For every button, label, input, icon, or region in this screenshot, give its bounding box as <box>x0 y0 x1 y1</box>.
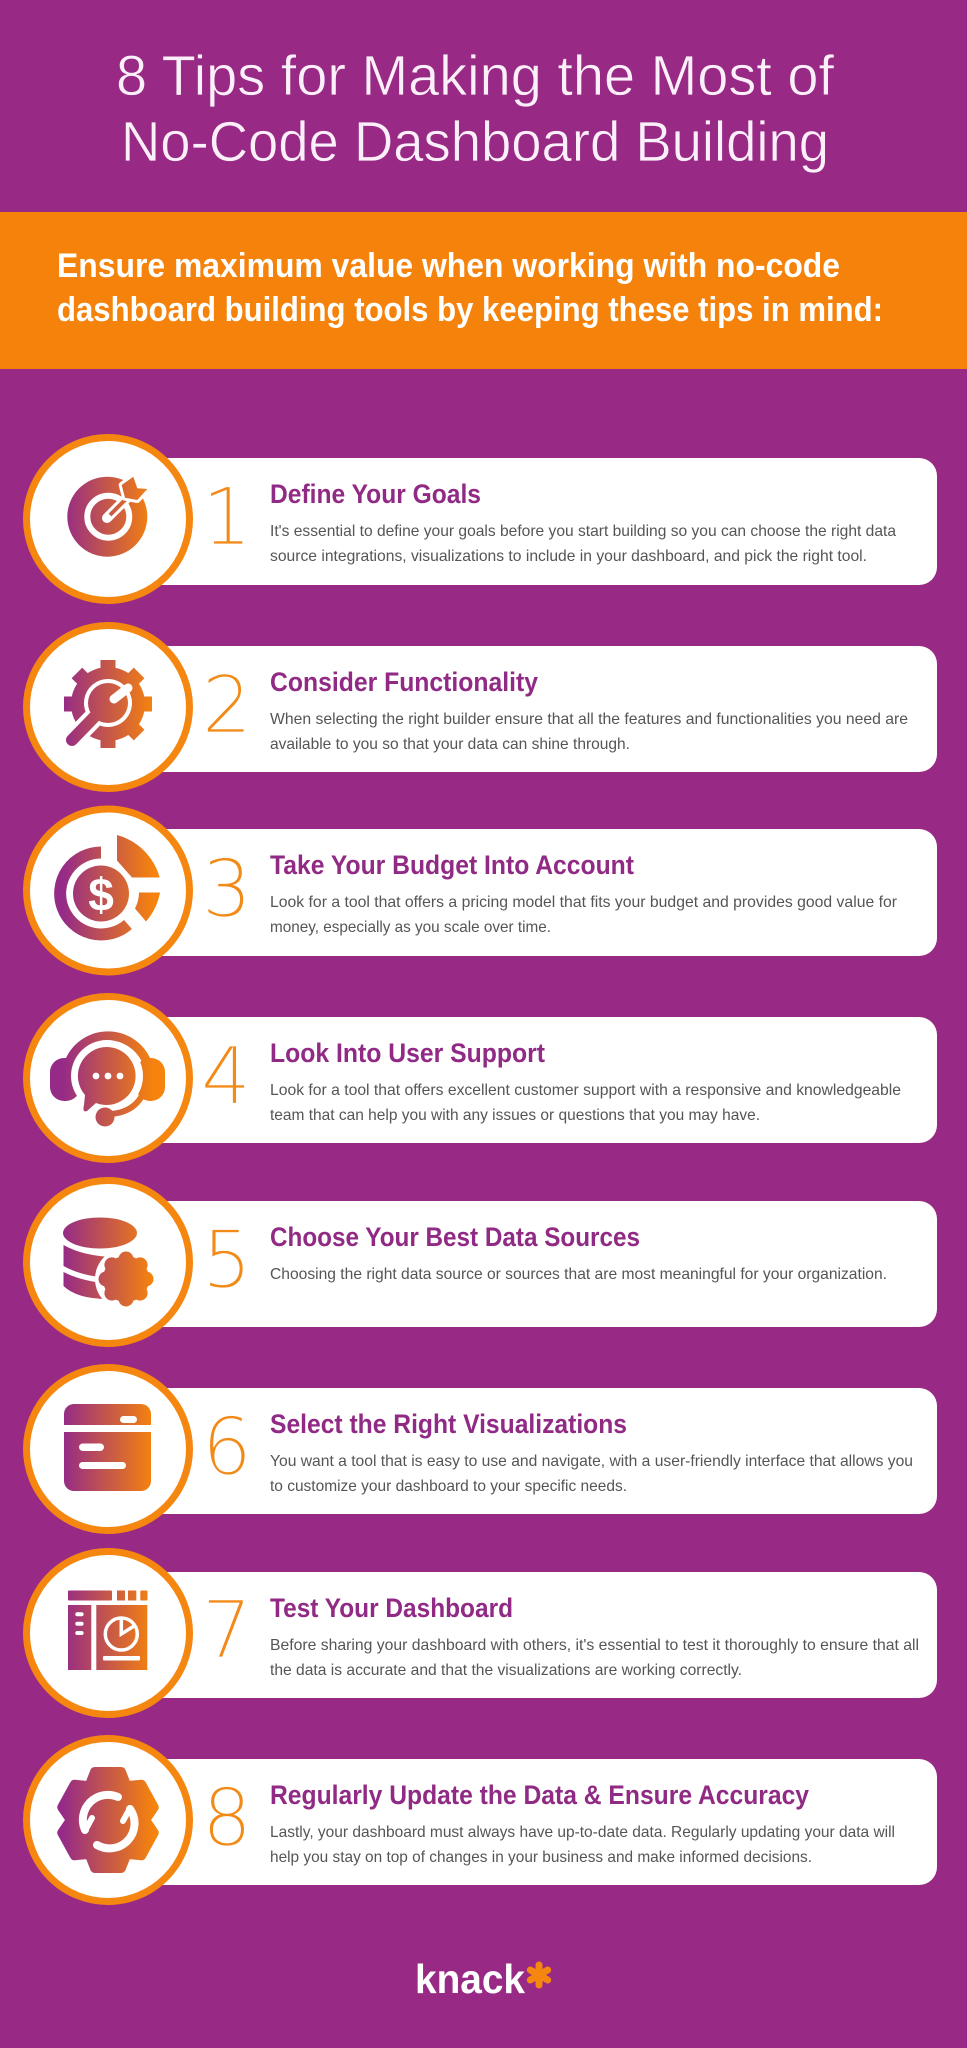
tip 5 <box>26 1180 937 1344</box>
tip 2: Consider Functionality <box>270 667 538 697</box>
tip 4: team that can help you with any issues or questions that you may have. <box>270 1107 760 1124</box>
tip 6: to customize your dashboard to your specific needs. <box>270 1478 627 1495</box>
title: 8 Tips for Making the Most of <box>116 44 834 108</box>
subtitle banner <box>0 212 967 369</box>
title: No-Code Dashboard Building <box>121 110 829 174</box>
tip 6: Select the Right Visualizations <box>270 1409 627 1439</box>
icon: budget pie with dollar: $ <box>88 868 114 920</box>
tip 7: the data is accurate and that the visualizations are working correctly. <box>270 1662 742 1679</box>
tip 8 <box>26 1738 937 1902</box>
tip 4: Look Into User Support <box>270 1038 545 1068</box>
tip 5: Choose Your Best Data Sources <box>270 1222 640 1252</box>
icon: dashboard with pie chart <box>68 1590 148 1670</box>
tip 3: Take Your Budget Into Account <box>270 850 634 880</box>
tip 2: available to you so that your data can shine through. <box>270 736 630 753</box>
logo: knack: knack <box>415 1956 525 2002</box>
tip 6: You want a tool that is easy to use and navigate, with a user-friendly interface that allows you <box>270 1453 913 1470</box>
title <box>116 44 834 174</box>
tip 8: Lastly, your dashboard must always have up-to-date data. Regularly updating your data will <box>270 1824 895 1841</box>
tip 7: Before sharing your dashboard with others, it's essential to test it thoroughly to ensure that all <box>270 1637 919 1654</box>
tip 6: 6 <box>202 1403 252 1493</box>
icon: browser window <box>64 1404 151 1491</box>
tip 3 <box>26 809 937 972</box>
subtitle banner: Ensure maximum value when working with no-code <box>57 247 840 285</box>
tip 1: 1 <box>202 473 252 563</box>
subtitle banner: dashboard building tools by keeping these tips in mind: <box>57 291 883 329</box>
tip 2: When selecting the right builder ensure that all the features and functionalities you need are <box>270 711 908 728</box>
tip 3: 3 <box>202 845 252 935</box>
icon: gear and wrench <box>64 660 152 748</box>
tip 3: Look for a tool that offers a pricing model that fits your budget and provides good value for <box>270 894 898 911</box>
tip 8: 8 <box>202 1774 252 1864</box>
tip 4 <box>26 996 937 1160</box>
tip 5: Choosing the right data source or sources that are most meaningful for your organization. <box>270 1266 887 1283</box>
tip 2: 2 <box>202 661 252 751</box>
tip 1: It's essential to define your goals before you start building so you can choose the right data <box>270 523 896 540</box>
icon: support headset with speech bubble <box>50 1036 165 1126</box>
icon: target with arrow <box>67 477 147 557</box>
icon: budget pie with dollar <box>60 835 160 934</box>
tip 5: 5 <box>202 1216 252 1306</box>
tip 8: help you stay on top of changes in your business and make informed decisions. <box>270 1849 812 1866</box>
icon: database with gear <box>63 1218 157 1310</box>
tip 3: money, especially as you scale over time. <box>270 919 551 936</box>
tip 2 <box>26 626 937 788</box>
tip 7: 7 <box>202 1586 252 1676</box>
tip 7: Test Your Dashboard <box>270 1593 513 1623</box>
tip 8: Regularly Update the Data & Ensure Accuracy <box>270 1780 809 1810</box>
tip 1 <box>26 438 937 600</box>
icon: gear with sync arrows <box>62 1772 154 1868</box>
tip 7 <box>26 1552 937 1714</box>
tip 6 <box>26 1368 937 1530</box>
tip 1: Define Your Goals <box>270 479 481 509</box>
tip 1: source integrations, visualizations to include in your dashboard, and pick the right tool. <box>270 548 867 565</box>
tip 4: 4 <box>201 1032 251 1122</box>
tip 4: Look for a tool that offers excellent customer support with a responsive and knowledgeable <box>270 1082 901 1099</box>
